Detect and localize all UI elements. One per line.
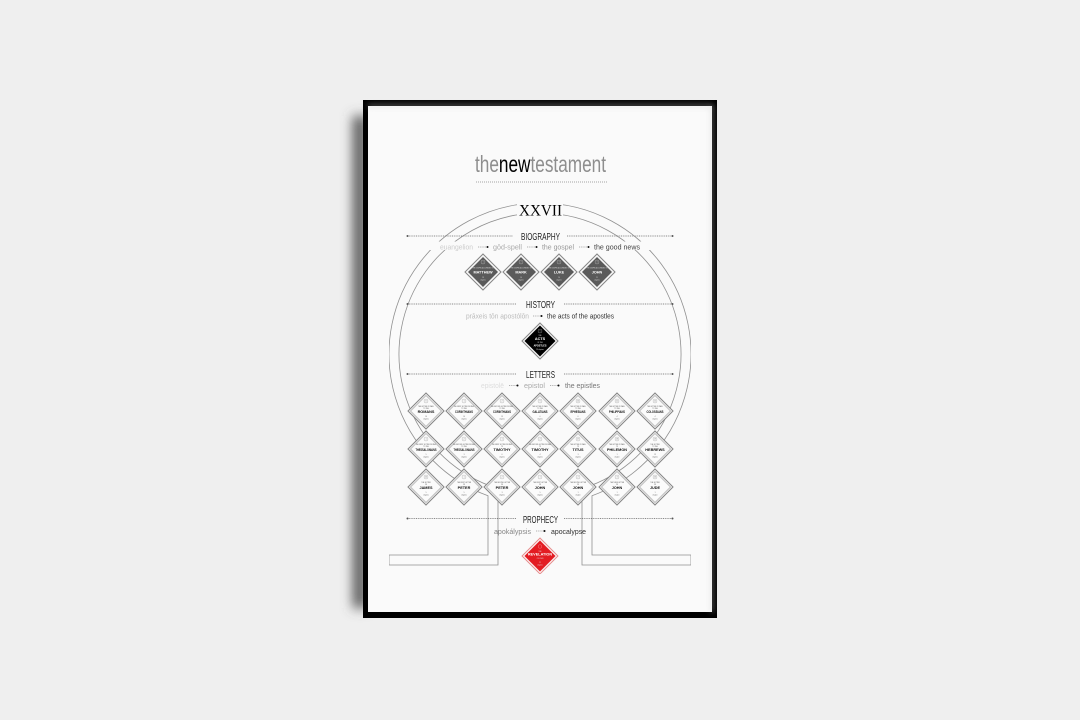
diamond: Philemon: THE LETTER OF PAUL [609,443,625,446]
diamond: Matthew: MATTHEW [473,270,493,274]
diamond: Matthew [465,254,501,290]
diamond: 1 Timothy: TO [501,446,504,448]
diamond: Philemon: TO [616,446,619,448]
diamond: Philemon: PHILEMON [607,448,627,452]
diamond: Galatians: chapters [537,418,543,420]
diamond: Luke: LUKE [554,270,565,274]
diamond: 2 Thessalonians: TO THE [461,446,467,448]
diamond: 2 John: chapter [575,494,581,496]
diamond: Jude: JUDE [650,486,661,490]
diamond: Philippians: 11 [616,401,618,403]
diamond: Galatians: 6 [540,416,541,418]
diamond: Titus: THE LETTER OF PAUL [570,443,586,446]
diamond: Hebrews [637,431,673,467]
diamond: James: 5 [426,492,427,494]
diamond: Philemon: chapter [614,456,620,458]
diamond: 1 Corinthians: CORINTHIANS [455,410,473,414]
diamond: 1 John: chapters [537,494,543,496]
diamond: 3 John: chapter [614,494,620,496]
diamond: 2 Thessalonians: chapters [461,456,467,458]
diamond: Galatians: THE LETTER OF PAUL [532,405,548,408]
diamond: Revelation: chapters [537,564,543,566]
section heading: prophecy: PROPHECY [523,514,558,526]
diamond: 1 John: OF [539,484,541,486]
diamond: Philemon: 18 [616,439,618,441]
section heading: history: HISTORY [526,299,555,311]
diamond: 1 Corinthians: THE FIRST LETTER OF PAUL [454,405,474,408]
diamond: 1 Timothy: 6 [502,454,503,456]
diamond: Titus: 17 [577,439,579,441]
diamond: 1 Corinthians: TO THE [461,408,467,410]
diamond: 2 Thessalonians [446,431,482,467]
diamond: John [579,254,615,290]
diamond: 2 John [560,469,596,505]
diamond: Colossians: chapters [652,418,658,420]
diamond: Ephesians: 6 [578,416,579,418]
diamond: 1 Timothy [484,431,520,467]
diamond: 1 Thessalonians: chapters [423,456,429,458]
diamond: 1 Corinthians: chapters [461,418,467,420]
diamond: Jude: chapter [652,494,658,496]
etymology line: biography [440,242,640,252]
diamond: Revelation [522,538,558,574]
diamond: Hebrews: chapters [652,456,658,458]
diamond: 1 John: THE FIRST LETTER [533,482,548,484]
diamond: 1 Thessalonians: THESSALONIANS [416,448,437,452]
diamond: 2 Thessalonians: 2 [464,439,465,441]
diamond: Colossians: THE LETTER OF PAUL [647,405,663,408]
diamond: 2 Peter: 2 [502,477,503,479]
diamond: 2 Timothy: 4 [540,454,541,456]
etymology line: history [466,312,614,320]
diamond: 3 John: 3 [617,477,618,479]
diamond: 1 Peter: 5 [464,492,465,494]
diamond: 2 Timothy: TO [539,446,542,448]
diamond: Mark: 16 [520,277,522,279]
diamond: Acts [522,323,558,359]
diamond: Romans: 16 [425,416,427,418]
title underline [476,181,607,183]
diamond: 1 Timothy: TIMOTHY [493,448,511,452]
poster content [389,151,691,574]
etymology line: biography: gōd-spell [493,242,522,252]
diamond: Philippians: 4 [617,416,618,418]
diamond: 2 John: THE SECOND LETTER [570,482,587,484]
diamond: 2 Timothy: 2 [540,439,541,441]
diamond: 2 Peter: THE SECOND LETTER [494,482,511,484]
diamond: Titus: TITUS [573,448,584,452]
diamond: 2 Peter: OF [501,484,503,486]
diamond: 1 Peter [446,469,482,505]
diamond: 1 Corinthians [446,393,482,429]
diamond: Matthew: 1 [483,262,484,264]
diamond: John: 21 [596,277,598,279]
etymology line: letters [481,381,600,390]
diamond: 1 Thessalonians: TO THE [423,446,429,448]
numeral XXVII: XXVII [519,202,562,220]
etymology line: letters: epistolē [481,381,504,390]
diamond: 2 Peter: 3 [502,492,503,494]
diamond: 2 Thessalonians: THE SECOND LETTER OF PAUL [453,443,476,446]
diamond: 2 Timothy: TIMOTHY [531,448,549,452]
diamond: Philippians [599,393,635,429]
diamond: Romans: TO THE [423,408,429,410]
diamond: Colossians: COLOSSIANS [646,410,664,414]
diamond: Jude [637,469,673,505]
diamond: 2 Peter [484,469,520,505]
diamond: James [408,469,444,505]
diamond: John: 4 [597,262,598,264]
diamond: 2 Peter: PETER [496,486,509,490]
diamond: James: THE LETTER [421,482,431,484]
diamond: 1 John: 1 [540,477,541,479]
ring gap behind numeral [517,200,563,217]
diamond: Galatians: TO THE [537,408,543,410]
diamond: Philippians: PHILIPPIANS [609,410,625,414]
diamond: 1 Thessalonians: THE FIRST LETTER OF PAUL [416,443,436,446]
diamond: 2 Thessalonians: 3 [464,454,465,456]
diamond: James: chapters [423,494,429,496]
diamond: 3 John: THE THIRD LETTER [610,482,625,484]
diamond: John: chapters [594,278,600,282]
diamond: Hebrews: 19 [654,439,656,441]
diamond: Acts: OF THE [537,342,543,344]
diamond: 1 Thessalonians: 1 [426,439,427,441]
ring gap behind biography text [425,242,655,250]
diamond: 1 Corinthians: 16 [463,416,465,418]
diamond: 2 Corinthians: chapters [499,418,505,420]
diamond: Luke: THE GOSPEL ACCORDING TO [548,266,571,270]
diamond: Colossians: 12 [654,401,656,403]
diamond: Colossians [637,393,673,429]
diamond: Hebrews: THE LETTER [650,444,660,446]
diamond: Mark: THE GOSPEL ACCORDING TO [510,266,533,270]
diamond: Ephesians: EPHESIANS [570,410,586,414]
diamond: 1 Timothy: THE FIRST LETTER OF PAUL [492,443,512,446]
diamond: 3 John: OF [616,484,618,486]
diamond: 2 Timothy [522,431,558,467]
diamond: Luke [541,254,577,290]
diamond: 1 John: JOHN [535,486,546,490]
diamond: Romans: ROMANS [418,410,435,414]
diamond: Ephesians: TO THE [575,408,581,410]
diamond: Luke: 3 [559,262,560,264]
diamond: Matthew: 28 [482,277,484,279]
diamond: Romans: THE LETTER OF PAUL [418,405,434,408]
diamond: 2 Thessalonians: THESSALONIANS [454,448,475,452]
diamond: Matthew: chapters [480,278,486,282]
diamond: Hebrews: 13 [654,454,656,456]
title: thenewtestament [475,151,606,177]
diamond: 1 Peter: THE FIRST LETTER [457,482,472,484]
diamond: Luke: 24 [558,277,560,279]
diamond: 1 Peter: OF [463,484,465,486]
diamond: Jude: THE LETTER [650,482,660,484]
diamond: Colossians: 4 [655,416,656,418]
poster frame [363,100,717,618]
diamond: Jude: OF [654,484,656,486]
diamond: Titus: 3 [578,454,579,456]
diamond: John: THE GOSPEL ACCORDING TO [586,266,609,270]
diamond: Colossians: TO THE [652,408,658,410]
diamond: 2 Timothy: chapters [537,456,543,458]
diamond: James: OF [425,484,427,486]
diamond: 1 Timothy: chapters [499,456,505,458]
diamond: Hebrews: HEBREWS [645,448,665,452]
diamond: 2 John: 2 [578,477,579,479]
diamond: Philemon [599,431,635,467]
diamond: Acts: ACTS [535,337,546,341]
diamond: Romans [408,393,444,429]
diamond: Titus [560,431,596,467]
diamond: James: JAMES [419,486,433,490]
diamond: 2 Corinthians: TO THE [499,408,505,410]
diamond: Philippians: TO THE [614,408,620,410]
etymology line: prophecy: apocalypse [551,527,586,536]
etymology line: letters: epistol [524,381,545,390]
diamond: Acts: APOSTLES [534,344,547,348]
diamond: 1 Corinthians: 1 [464,401,465,403]
diamond: 1 Peter: chapters [461,494,467,496]
diamond: John: JOHN [592,270,603,274]
diamond: Acts: 5 [540,331,541,333]
diamond: Revelation: 22 [539,562,541,564]
diamond: Galatians [522,393,558,429]
etymology line: history: the acts of the apostles [547,312,614,320]
etymology line: prophecy [494,527,586,536]
etymology line: letters: the epistles [565,381,600,390]
diamond: Revelation: OF JOHN [537,558,543,560]
diamond: 2 John: OF [577,484,579,486]
diamond: 1 John [522,469,558,505]
diamond: 2 John: 1 [578,492,579,494]
diamond: Ephesians: THE LETTER OF PAUL [570,405,586,408]
section heading: biography: BIOGRAPHY [521,231,560,243]
diamond: 2 Corinthians: 2 [502,401,503,403]
diamond: 2 Corinthians [484,393,520,429]
diamond: 2 Peter: chapters [499,494,505,496]
diamond: Revelation: THE [538,551,542,553]
diamond: 2 Timothy: THE SECOND LETTER OF PAUL [529,443,552,446]
diamond: 1 Peter: PETER [458,486,471,490]
diamond: 1 Peter: 1 [464,477,465,479]
diamond: 1 Thessalonians: 5 [426,454,427,456]
diamond: 2 Corinthians: THE SECOND LETTER OF PAUL [491,405,514,408]
diamond: 1 John: 5 [540,492,541,494]
diamond: Acts: THE [538,335,542,337]
frame shadow [353,116,367,608]
diamond: Romans: 6 [426,401,427,403]
etymology line: biography: the gospel [542,242,574,252]
diamond: Mark: MARK [515,270,527,274]
diamond: Revelation: REVELATION [528,552,552,556]
diamond: Jude: 26 [654,477,656,479]
diamond: Galatians: GALATIANS [532,410,548,414]
diamond: Acts: 28 chapters [536,348,544,351]
diamond: Philemon: 1 [617,454,618,456]
diamond: Mark [503,254,539,290]
diamond: Matthew: THE GOSPEL ACCORDING TO [472,266,495,270]
diamond: Galatians: 9 [540,401,541,403]
diamond: Titus: chapters [575,456,581,458]
diamond: Philippians: THE LETTER OF PAUL [609,405,625,408]
diamond: Philippians: chapters [614,418,620,420]
diamond: 1 Thessalonians [408,431,444,467]
diamond: Jude: 1 [655,492,656,494]
diamond: 2 Corinthians: 13 [501,416,503,418]
diamond: Ephesians [560,393,596,429]
diamond: 3 John: JOHN [612,486,623,490]
diamond: James: 20 [425,477,427,479]
diamond: Ephesians: 10 [577,401,579,403]
diamond: 3 John [599,469,635,505]
diamond: 2 John: JOHN [573,486,584,490]
etymology line: prophecy: apokálypsis [494,527,531,536]
diamond: Mark: 2 [521,262,522,264]
diamond: 2 Corinthians: CORINTHIANS [493,410,511,414]
etymology line: history: prāxeis tōn apostólōn [466,312,529,320]
etymology line: biography: euangelion [440,242,473,252]
etymology line: biography: the good news [594,242,640,252]
section heading: letters: LETTERS [526,369,555,381]
ring and stems outline [389,203,691,565]
diamond: Titus: TO [577,446,580,448]
diamond: Luke: chapters [556,278,562,282]
diamond: 1 Timothy: 1 [502,439,503,441]
diamond: Hebrews: TO THE [652,446,658,448]
diamond: Romans: chapters [423,418,429,420]
diamond: Mark: chapters [518,278,524,282]
diamond: Ephesians: chapters [575,418,581,420]
diamond: 3 John: 1 [617,492,618,494]
